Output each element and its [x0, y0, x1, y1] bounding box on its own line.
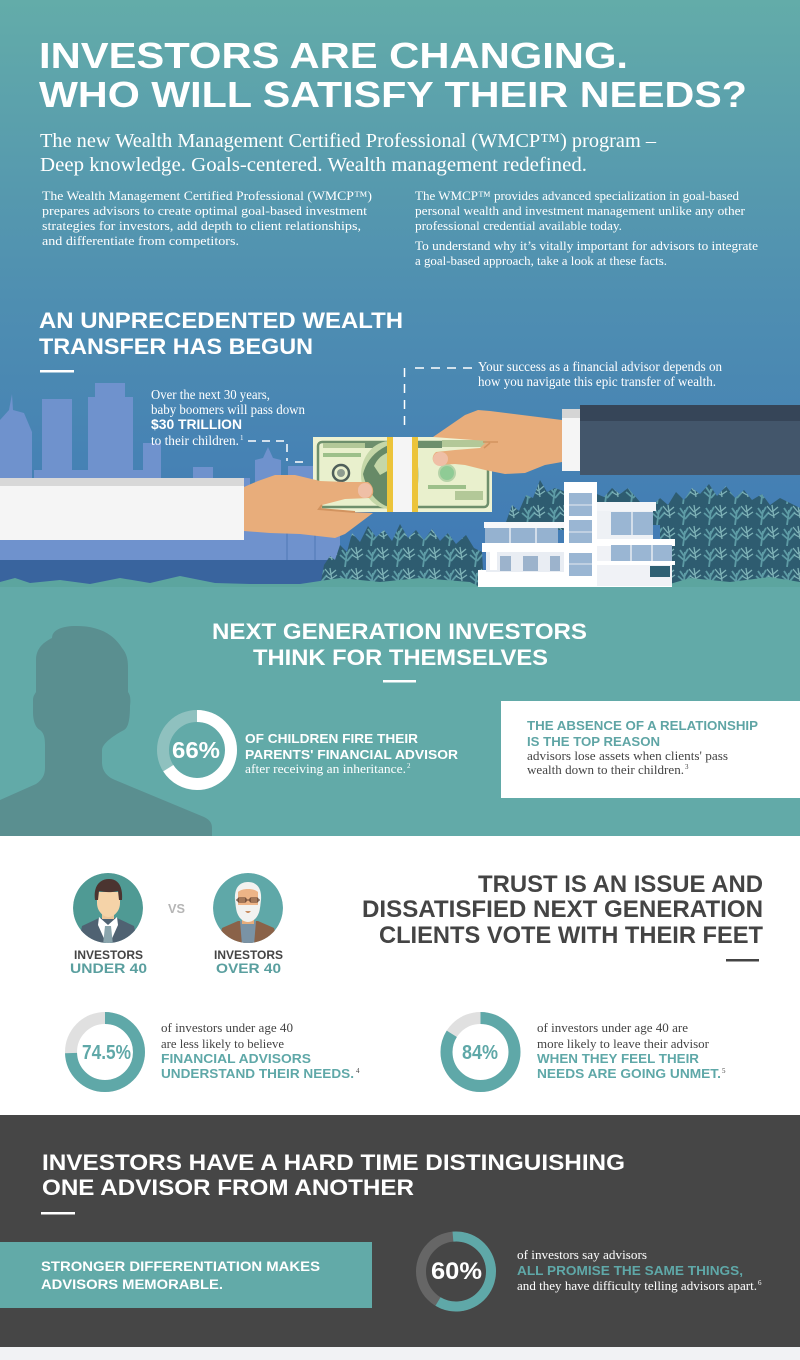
- text block: same promises: and they have difficulty telling advisors apart.: [517, 1278, 757, 1293]
- arrow: dashed line to left hand: [248, 441, 303, 462]
- ground strip: [0, 576, 800, 587]
- text block: understand their needs: UNDERSTAND THEIR NEEDS.: [161, 1066, 354, 1081]
- label: investors under 40: [70, 950, 147, 976]
- icon: older investor avatar: [213, 873, 283, 945]
- callout: absence of a relationship: 3: [685, 763, 689, 771]
- subtitle: [40, 130, 657, 176]
- illustration: left sleeve: [0, 478, 244, 540]
- text block: right intro: To understand why it’s vitally important for advisors to integrate: [415, 238, 758, 253]
- text block: left intro: The Wealth Management Certified Professional (WMCP™): [42, 188, 372, 203]
- callout: absence of a relationship: advisors lose assets when clients' pass: [527, 748, 728, 763]
- callout: absence of a relationship: wealth down to their children.: [527, 762, 684, 777]
- heading: wealth transfer: TRANSFER HAS BEGUN: [39, 334, 313, 359]
- callout: stronger differentiation: STRONGER DIFFERENTIATION MAKES: [41, 1259, 320, 1274]
- illustration: city skyline: [0, 383, 340, 560]
- illustration: left hand: [244, 475, 373, 538]
- text block: left intro: prepares advisors to create optimal goal-based investment: [42, 203, 367, 218]
- panel: distinguishing advisors: [0, 1115, 800, 1347]
- text block: left intro: strategies for investors, add depth to client relationships,: [42, 218, 361, 233]
- label: vs: VS: [168, 902, 185, 916]
- panel: header and wealth transfer background: [0, 0, 800, 587]
- donut chart: 74.5 percent: 74.5%: [82, 1042, 131, 1064]
- text block: children fire advisor: [245, 731, 459, 776]
- heading: wealth transfer: [39, 308, 403, 372]
- callout: advisor success: [478, 359, 722, 389]
- donut chart: 74.5 percent: [71, 1018, 139, 1086]
- callout: 30 trillion: 1: [240, 434, 244, 442]
- heading: hard time distinguishing: [41, 1150, 625, 1214]
- text block: needs going unmet: NEEDS ARE GOING UNMET.: [537, 1066, 721, 1081]
- callout: absence of a relationship: IS THE TOP REASON: [527, 734, 660, 749]
- label: investors over 40: [214, 950, 283, 976]
- heading: trust is an issue: CLIENTS VOTE WITH THEIR FEET: [379, 922, 763, 949]
- callout: absence of a relationship: THE ABSENCE OF A RELATIONSHIP: [527, 718, 758, 733]
- heading: next generation: THINK FOR THEMSELVES: [253, 645, 548, 670]
- callout: advisor success: how you navigate this epic transfer of wealth.: [478, 374, 716, 389]
- text block: needs going unmet: more likely to leave their advisor: [537, 1036, 710, 1051]
- donut chart: 60 percent: 60%: [431, 1258, 482, 1285]
- heading: hard time distinguishing: ONE ADVISOR FROM ANOTHER: [42, 1175, 414, 1200]
- callout: 30 trillion: Over the next 30 years,: [151, 387, 270, 402]
- heading: next generation: [212, 619, 587, 682]
- donut chart: 60 percent: [418, 1234, 494, 1309]
- heading: hard time distinguishing: INVESTORS HAVE A HARD TIME DISTINGUISHING: [42, 1150, 625, 1175]
- foliage: behind and around house: [320, 480, 800, 587]
- callout: stronger differentiation: [0, 1242, 372, 1308]
- text block: needs going unmet: 5: [722, 1067, 726, 1075]
- text block: understand their needs: 4: [356, 1067, 360, 1075]
- callout: absence of a relationship: [501, 701, 800, 798]
- heading: trust is an issue: DISSATISFIED NEXT GENERATION: [362, 896, 763, 923]
- text block: right intro: professional credential available today.: [415, 218, 622, 233]
- text block: right intro: a goal-based approach, take a look at these facts.: [415, 253, 667, 268]
- callout: 30 trillion: [151, 387, 305, 448]
- title: WHO WILL SATISFY THEIR NEEDS?: [39, 74, 747, 115]
- text block: same promises: of investors say advisors: [517, 1247, 647, 1262]
- arrow: dashed line to right hand: [404, 368, 472, 426]
- icon: person silhouette: [0, 626, 212, 836]
- callout: 30 trillion: baby boomers will pass down: [151, 402, 305, 417]
- text block: children fire advisor: 2: [407, 762, 411, 770]
- text block: left intro: [42, 188, 372, 248]
- text block: children fire advisor: OF CHILDREN FIRE THEIR: [245, 731, 419, 746]
- text block: understand their needs: [161, 1020, 360, 1081]
- text block: same promises: ALL PROMISE THE SAME THINGS,: [517, 1263, 743, 1278]
- heading: trust is an issue: TRUST IS AN ISSUE AND: [478, 871, 763, 898]
- text block: needs going unmet: [537, 1020, 726, 1081]
- panel: next generation investors: [0, 587, 800, 836]
- callout: advisor success: Your success as a financial advisor depends on: [478, 359, 722, 374]
- callout: stronger differentiation: ADVISORS MEMORABLE.: [41, 1277, 223, 1292]
- donut chart: 66 percent: [163, 716, 231, 784]
- label: investors under 40: INVESTORS: [74, 950, 143, 962]
- text block: right intro: [415, 188, 758, 268]
- water: [0, 560, 340, 587]
- text block: same promises: [517, 1247, 762, 1293]
- title: INVESTORS ARE CHANGING.: [39, 35, 628, 76]
- subtitle: Deep knowledge. Goals-centered. Wealth management redefined.: [40, 154, 587, 176]
- illustration: banknote stack: [313, 437, 492, 512]
- illustration: right sleeve: [562, 405, 800, 475]
- illustration: right hand: [433, 410, 562, 474]
- title: [39, 35, 747, 115]
- label: investors over 40: OVER 40: [216, 960, 281, 976]
- text block: children fire advisor: after receiving an inheritance.: [245, 761, 406, 776]
- donut chart: 84 percent: [446, 1018, 514, 1086]
- text block: needs going unmet: WHEN THEY FEEL THEIR: [537, 1051, 700, 1066]
- heading: next generation: NEXT GENERATION INVESTORS: [212, 619, 587, 644]
- label: investors under 40: UNDER 40: [70, 960, 147, 976]
- text block: right intro: The WMCP™ provides advanced specialization in goal-based: [415, 188, 739, 203]
- text block: right intro: personal wealth and investment management unlike any other: [415, 203, 746, 218]
- label: investors over 40: INVESTORS: [214, 950, 283, 962]
- heading: wealth transfer: AN UNPRECEDENTED WEALTH: [39, 308, 403, 333]
- footer band: [0, 1347, 800, 1360]
- donut chart: 84 percent: 84%: [462, 1042, 498, 1064]
- callout: 30 trillion: to their children.: [151, 433, 239, 448]
- illustration: modern house: [478, 482, 675, 587]
- text block: understand their needs: of investors under age 40: [161, 1020, 293, 1035]
- heading: trust is an issue: [362, 871, 763, 962]
- donut chart: 66 percent: 66%: [172, 737, 220, 763]
- text block: children fire advisor: PARENTS' FINANCIAL ADVISOR: [245, 747, 459, 762]
- icon: young investor avatar: [73, 873, 143, 945]
- callout: 30 trillion: $30 TRILLION: [151, 417, 242, 432]
- text block: understand their needs: FINANCIAL ADVISORS: [161, 1051, 311, 1066]
- subtitle: The new Wealth Management Certified Professional (WMCP™) program –: [40, 130, 657, 152]
- text block: needs going unmet: of investors under age 40 are: [537, 1020, 688, 1035]
- text block: left intro: and differentiate from competitors.: [42, 233, 239, 248]
- panel: trust section: [0, 836, 800, 1115]
- text block: understand their needs: are less likely to believe: [161, 1036, 284, 1051]
- text block: same promises: 6: [758, 1279, 762, 1287]
